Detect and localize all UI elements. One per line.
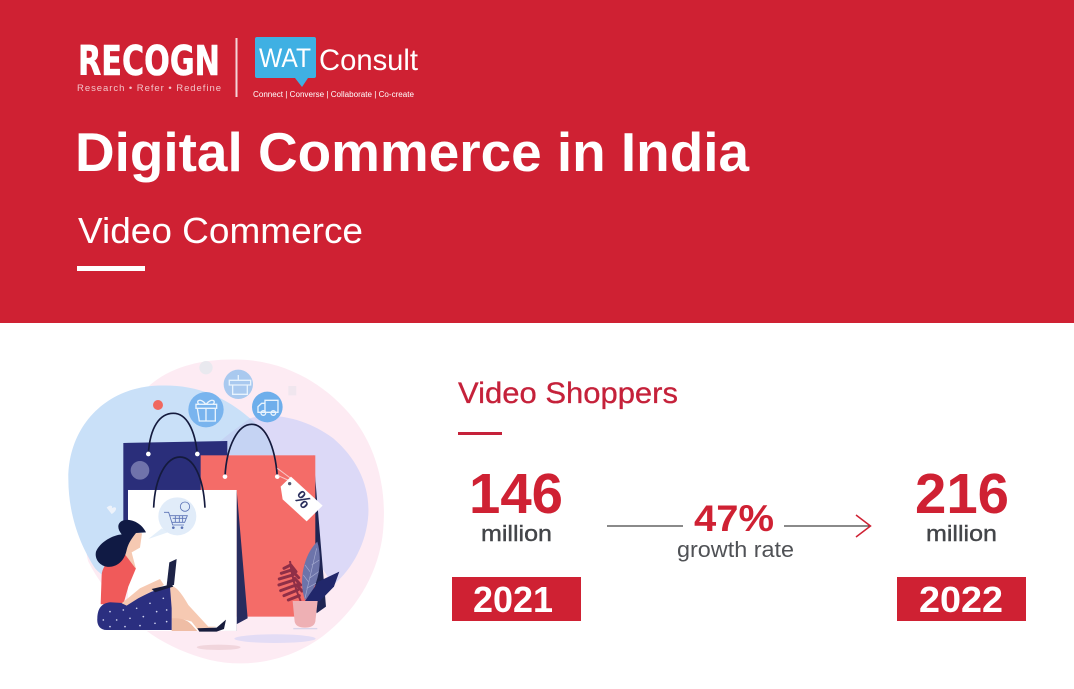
price tag [277, 468, 323, 521]
stat: 2022: million [926, 521, 997, 546]
stat: 2021: 146 [469, 462, 563, 526]
panel: red header [0, 0, 1074, 323]
stat: 2022: 2022 [919, 579, 1003, 620]
legs [170, 586, 217, 630]
woman with laptop [96, 520, 226, 632]
floating icons [107, 361, 296, 514]
stat: 2022 [897, 462, 1026, 621]
stat: 2022: 216 [915, 462, 1009, 526]
logo: WAT Consult: Connect | Converse | Collaborate | Co-create [253, 90, 415, 99]
white bag [128, 457, 248, 631]
arm [122, 579, 164, 606]
coral bag [201, 424, 326, 617]
title: Digital Commerce in India [75, 121, 749, 183]
logo: Recogn: RECOGN [78, 37, 220, 85]
torso [101, 552, 136, 604]
arrow and growth rate: 47% [694, 498, 774, 539]
logo: Recogn [77, 37, 221, 94]
subtitle: Video Commerce [78, 210, 363, 251]
illustration: shopper with bags [68, 360, 384, 663]
stat: 2021: million [481, 521, 552, 546]
arrow and growth rate [607, 498, 870, 562]
laptop [152, 584, 173, 592]
navy bag [123, 413, 227, 545]
panel: video shoppers stats [452, 377, 1026, 621]
cart bubble [148, 497, 196, 539]
price tag: % [290, 487, 315, 512]
arrow and growth rate: growth rate [677, 537, 794, 562]
logo: WAT Consult [236, 37, 419, 99]
logo: WAT Consult: WAT [259, 43, 311, 73]
plant [279, 542, 339, 629]
heading: Video Shoppers [458, 377, 678, 410]
hair [96, 520, 146, 567]
logo: Recogn: Research • Refer • Redefine [77, 83, 221, 94]
logo: WAT Consult: Consult [319, 44, 419, 77]
stat: 2021 [452, 462, 581, 621]
stat: 2021: 2021 [473, 579, 553, 620]
neck and face [125, 532, 142, 569]
skirt [97, 587, 172, 630]
background blobs [68, 360, 384, 663]
ground shadows [197, 634, 316, 650]
